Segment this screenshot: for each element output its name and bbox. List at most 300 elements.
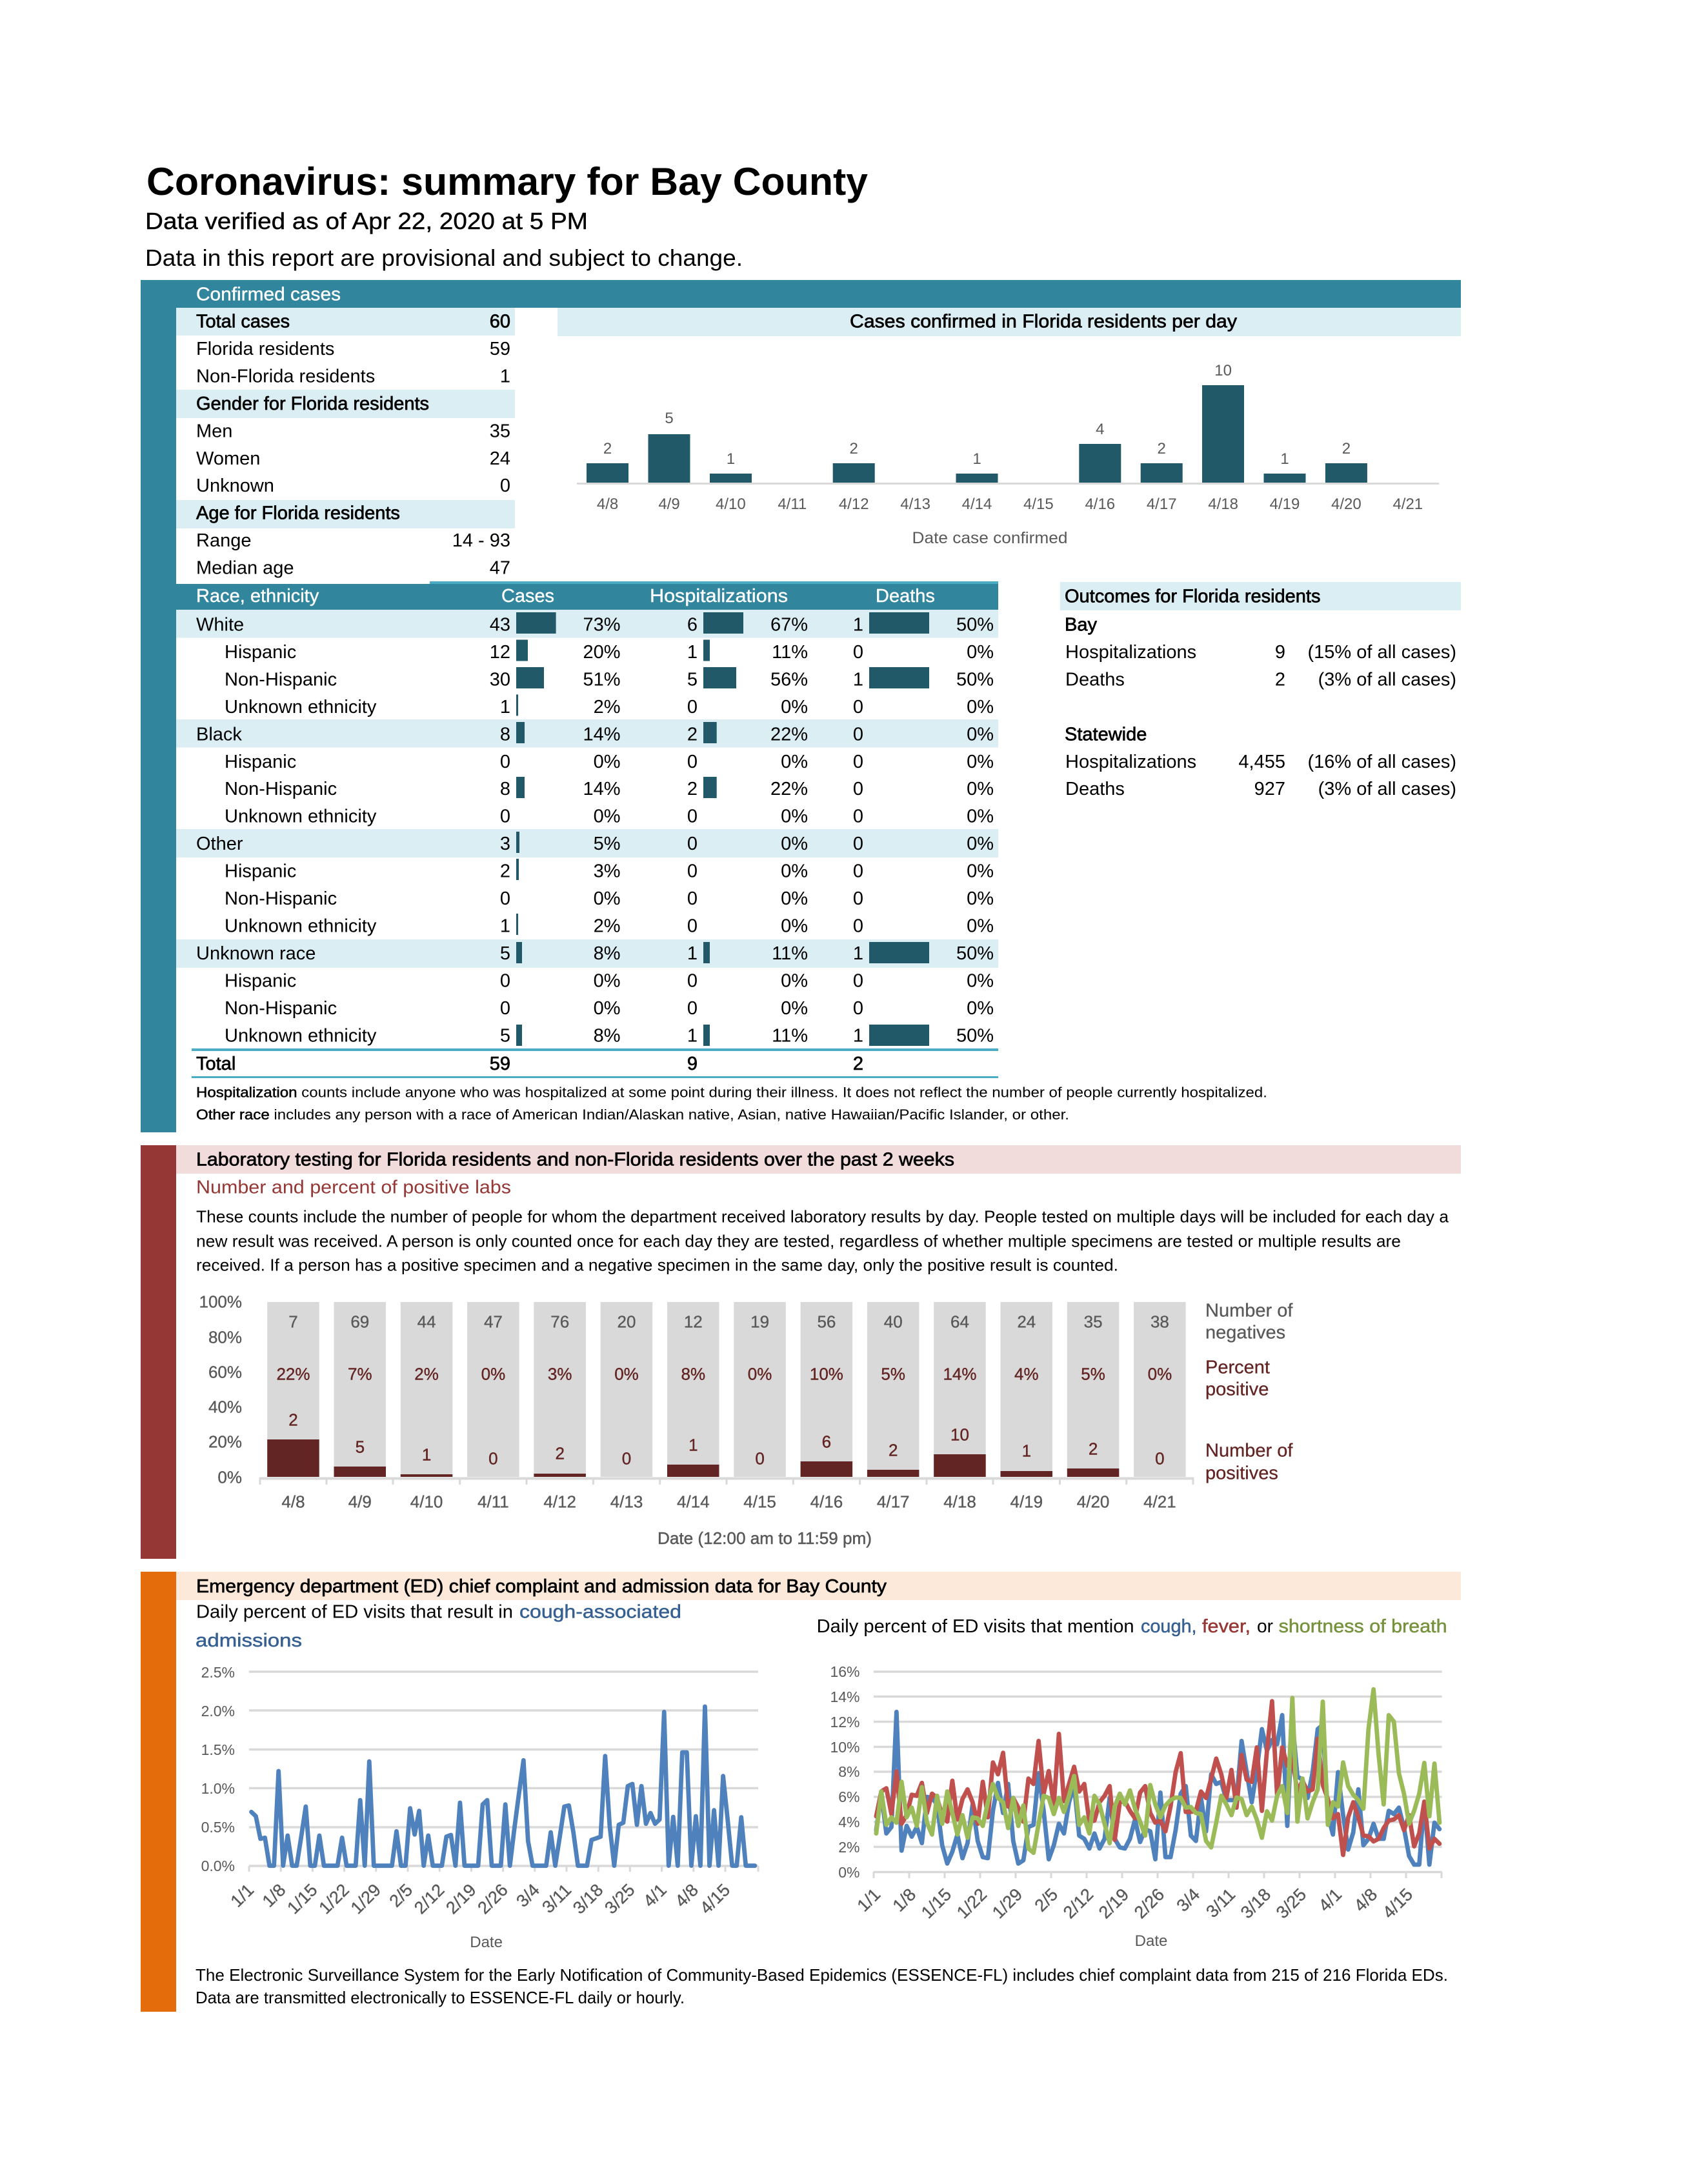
- race and ethnicity table: 5: [687, 669, 698, 690]
- bar chart: cases per day: 1: [727, 450, 735, 468]
- race and ethnicity table: Hospitalizations: [650, 586, 788, 606]
- line chart: cough-associated admissions: 2/19: [442, 1880, 480, 1918]
- line chart: cough, fever, shortness of breath: Date: [1135, 1932, 1167, 1950]
- stacked bar chart: positive labs: 80%: [208, 1328, 242, 1347]
- ESSENCE-FL note: Data are transmitted electronically to ESSENCE-FL daily or hourly.: [196, 1988, 685, 2007]
- case summary table: Non-Florida residents: [196, 366, 375, 387]
- stacked bar chart: positive labs: 0%: [748, 1364, 772, 1383]
- race and ethnicity table: 0: [853, 752, 863, 772]
- race and ethnicity table: 1: [853, 1025, 863, 1046]
- line chart: cough-associated admissions: 1.0%: [201, 1780, 235, 1797]
- race and ethnicity table: 0%: [967, 970, 994, 991]
- stacked bar chart: positive labs: 22%: [276, 1364, 310, 1383]
- race and ethnicity table: 2: [687, 779, 698, 799]
- stacked bar chart: positive labs: 2%: [414, 1364, 439, 1383]
- race and ethnicity table: 0%: [967, 916, 994, 937]
- line chart: cough-associated admissions: 1/15: [283, 1880, 321, 1918]
- stacked bar chart: positive labs: 44: [417, 1312, 436, 1332]
- stacked bar chart: positive labs: 4/12: [543, 1492, 576, 1511]
- race and ethnicity table: 0: [853, 998, 863, 1019]
- stacked bar chart: positive labs: 5%: [881, 1364, 905, 1383]
- race and ethnicity table: 1: [687, 1025, 698, 1046]
- line chart: cough-associated admissions: [201, 1664, 758, 1951]
- outcomes table: Bay: [1065, 614, 1097, 635]
- panel: emergency department data: [141, 1572, 1461, 2012]
- outcomes table: (15% of all cases): [1307, 642, 1456, 663]
- bar chart: cases per day: 5: [665, 410, 674, 427]
- footnote: hospitalization: Hospitalization counts include anyone who was hospitalized at some point during their illness. It does not reflect the number of people currently hospitalized.: [196, 1084, 1267, 1101]
- race and ethnicity table: 2: [687, 724, 698, 745]
- case summary table: Age for Florida residents: [196, 503, 400, 524]
- outcomes table: (3% of all cases): [1318, 779, 1456, 799]
- stacked bar chart: positive labs: 0: [622, 1449, 631, 1468]
- outcomes table: 4,455: [1238, 752, 1285, 772]
- footnote: other race: Other race includes any person with a race of American Indian/Alaskan native, Asian, native Hawaiian/Pacific Islander, or other.: [196, 1107, 1069, 1123]
- race and ethnicity table: 0%: [967, 724, 994, 745]
- case summary table: Total cases: [196, 311, 290, 332]
- legend: number of positives: positives: [1205, 1463, 1278, 1484]
- race and ethnicity table: 0%: [967, 752, 994, 772]
- case summary table: 60: [490, 311, 510, 332]
- race and ethnicity table: 0: [853, 970, 863, 991]
- stacked bar chart: positive labs: 60%: [208, 1363, 242, 1382]
- race and ethnicity table: 0: [853, 697, 863, 717]
- race and ethnicity table: 11%: [772, 1025, 808, 1046]
- legend: percent positive: [1205, 1357, 1270, 1400]
- bar chart: cases per day: 4/16: [1085, 496, 1115, 513]
- stacked bar chart: positive labs: 38: [1150, 1312, 1169, 1332]
- race and ethnicity table: 0: [853, 642, 863, 663]
- stacked bar chart: positive labs: 56: [817, 1312, 836, 1332]
- stacked bar chart: positive labs: 4/18: [943, 1492, 976, 1511]
- race and ethnicity table: Hispanic: [225, 970, 296, 991]
- line chart: cough-associated admissions: 3/4: [512, 1880, 543, 1911]
- race and ethnicity table: Unknown ethnicity: [225, 806, 377, 827]
- panel: confirmed cases: [141, 280, 1461, 1132]
- line chart: cough, fever, shortness of breath: 1/15: [918, 1885, 955, 1922]
- race and ethnicity table: Non-Hispanic: [225, 779, 337, 799]
- line chart: cough-associated admissions: 4/1: [639, 1880, 670, 1911]
- race and ethnicity table: 1: [853, 614, 863, 635]
- race and ethnicity table: 56%: [770, 669, 808, 690]
- line chart: cough-associated admissions: Date: [470, 1934, 503, 1951]
- race and ethnicity table: 11%: [772, 943, 808, 964]
- line chart: cough, fever, shortness of breath: 14%: [830, 1688, 859, 1705]
- stacked bar chart: positive labs: 8%: [681, 1364, 705, 1383]
- stacked bar chart: positive labs: 2: [555, 1444, 565, 1463]
- race and ethnicity table: 0%: [781, 998, 808, 1019]
- subheading: positive labs: Number and percent of positive labs: [196, 1177, 511, 1197]
- stacked bar chart: positive labs: 1: [1022, 1441, 1031, 1461]
- bar chart: cases per day: Date case confirmed: [912, 529, 1067, 547]
- race and ethnicity table: 1: [500, 916, 510, 937]
- line chart: cough, fever, shortness of breath: 6%: [838, 1788, 859, 1805]
- race and ethnicity table: 0: [853, 861, 863, 882]
- race and ethnicity table: 0%: [781, 752, 808, 772]
- subtitle: cough, fever, shortness of breath: or: [1257, 1616, 1273, 1637]
- stacked bar chart: positive labs: 2: [889, 1440, 898, 1459]
- race and ethnicity table: 43: [490, 614, 510, 635]
- stacked bar chart: positive labs: 35: [1084, 1312, 1103, 1332]
- case summary table: 35: [490, 421, 510, 441]
- heading: confirmed cases: Confirmed cases: [196, 284, 341, 305]
- race and ethnicity table: 0%: [781, 697, 808, 717]
- race and ethnicity table: 0: [687, 752, 698, 772]
- ESSENCE-FL note: The Electronic Surveillance System for the Early Notification of Community-Based Epidemics (ESSENCE-FL) includes chief complaint data from 215 of 216 Florida EDs.: [196, 1965, 1448, 1985]
- case summary table: 24: [490, 448, 510, 469]
- outcomes table: Deaths: [1065, 779, 1125, 799]
- stacked bar chart: positive labs: 4/17: [877, 1492, 910, 1511]
- stacked bar chart: positive labs: 0: [488, 1449, 498, 1468]
- bar chart: cases per day: 4/10: [716, 496, 746, 513]
- race and ethnicity table: Cases: [501, 586, 554, 606]
- stacked bar chart: positive labs: 6: [822, 1432, 831, 1452]
- race and ethnicity table: 0%: [967, 779, 994, 799]
- bar chart: cases per day: 4: [1096, 421, 1104, 438]
- outcomes table: Outcomes for Florida residents: [1065, 586, 1320, 606]
- stacked bar chart: positive labs: 0%: [1148, 1364, 1172, 1383]
- legend: number of negatives: [1205, 1301, 1293, 1343]
- stacked bar chart: positive labs: 1: [422, 1445, 431, 1465]
- line chart: cough, fever, shortness of breath: 4/1: [1314, 1885, 1345, 1916]
- line chart: cough, fever, shortness of breath: 10%: [830, 1739, 859, 1756]
- bar chart: cases per day: 4/21: [1392, 496, 1423, 513]
- outcomes table: Hospitalizations: [1065, 642, 1196, 663]
- explanatory paragraph: [196, 1207, 1449, 1275]
- race and ethnicity table: 12: [490, 642, 510, 663]
- subtitle: cough, fever, shortness of breath: Daily percent of ED visits that mention: [817, 1616, 1134, 1637]
- race and ethnicity table: Unknown race: [196, 943, 316, 964]
- race and ethnicity table: 2%: [594, 697, 621, 717]
- race and ethnicity table: 0: [500, 998, 510, 1019]
- race and ethnicity table: 3%: [594, 861, 621, 882]
- line chart: cough-associated admissions: 3/18: [569, 1880, 607, 1918]
- race and ethnicity table: 0: [853, 888, 863, 909]
- race and ethnicity table: 14%: [583, 779, 621, 799]
- race and ethnicity table: 0%: [594, 752, 621, 772]
- case summary table: Women: [196, 448, 260, 469]
- race and ethnicity table: 11%: [772, 642, 808, 663]
- outcomes table: Statewide: [1065, 724, 1147, 745]
- bar chart: cases per day: 4/17: [1147, 496, 1177, 513]
- bar chart: cases per day: 4/13: [900, 496, 930, 513]
- stacked bar chart: positive labs: 0%: [614, 1364, 639, 1383]
- race and ethnicity table: [176, 581, 998, 1078]
- outcomes table: [1060, 582, 1461, 799]
- stacked bar chart: positive labs: 14%: [943, 1364, 977, 1383]
- line chart: cough-associated admissions: 2.5%: [201, 1664, 235, 1681]
- race and ethnicity table: 0: [687, 970, 698, 991]
- stacked bar chart: positive labs: 4/16: [810, 1492, 843, 1511]
- line chart: cough, fever, shortness of breath: 3/18: [1237, 1885, 1274, 1922]
- bar chart: cases per day: 2: [603, 440, 612, 457]
- race and ethnicity table: 0: [687, 998, 698, 1019]
- race and ethnicity table: Hispanic: [225, 642, 296, 663]
- stacked bar chart: positive labs: [199, 1292, 1194, 1548]
- stacked bar chart: positive labs: 4/8: [281, 1492, 305, 1511]
- legend: number of positives: Number of: [1205, 1440, 1293, 1461]
- bar chart: cases per day: 4/8: [597, 496, 618, 513]
- stacked bar chart: positive labs: 76: [550, 1312, 569, 1332]
- race and ethnicity table: 1: [500, 697, 510, 717]
- line chart: cough, fever, shortness of breath: 16%: [830, 1663, 859, 1680]
- line chart: cough-associated admissions: 2/12: [410, 1880, 448, 1918]
- race and ethnicity table: 0%: [781, 861, 808, 882]
- race and ethnicity table: Unknown ethnicity: [225, 916, 377, 937]
- race and ethnicity table: 0: [687, 916, 698, 937]
- race and ethnicity table: 0%: [781, 888, 808, 909]
- line chart: cough, fever, shortness of breath: 8%: [838, 1763, 859, 1780]
- case summary table: Gender for Florida residents: [196, 394, 429, 414]
- stacked bar chart: positive labs: 4/13: [610, 1492, 643, 1511]
- race and ethnicity table: 0: [687, 806, 698, 827]
- race and ethnicity table: 59: [490, 1054, 510, 1074]
- ESSENCE-FL note: [196, 1965, 1448, 2007]
- bar chart: cases per day: 4/19: [1270, 496, 1300, 513]
- race and ethnicity table: 8: [500, 724, 510, 745]
- race and ethnicity table: Hispanic: [225, 752, 296, 772]
- stacked bar chart: positive labs: 4/20: [1077, 1492, 1109, 1511]
- line chart: cough, fever, shortness of breath: 1/22: [953, 1885, 990, 1922]
- line chart: cough-associated admissions: 1/22: [315, 1880, 353, 1918]
- outcomes table: 2: [1275, 669, 1285, 690]
- subtitle: cough-associated admissions: admissions: [196, 1630, 302, 1651]
- stacked bar chart: positive labs: 0: [1155, 1449, 1165, 1468]
- race and ethnicity table: 67%: [770, 614, 808, 635]
- bar chart: cases per day: 4/15: [1023, 496, 1054, 513]
- race and ethnicity table: 0%: [967, 834, 994, 854]
- outcomes table: (16% of all cases): [1307, 752, 1456, 772]
- race and ethnicity table: White: [196, 614, 244, 635]
- race and ethnicity table: 1: [687, 943, 698, 964]
- line chart: cough, fever, shortness of breath: 12%: [830, 1714, 859, 1730]
- race and ethnicity table: 0: [687, 888, 698, 909]
- bar chart: cases per day: 2: [1158, 440, 1166, 457]
- bar chart: cases per day: 1: [972, 450, 981, 468]
- heading: laboratory testing: Laboratory testing for Florida residents and non-Florida residents over the past 2 weeks: [196, 1150, 954, 1170]
- line chart: cough, fever, shortness of breath: 2/12: [1060, 1885, 1097, 1922]
- race and ethnicity table: 2: [853, 1054, 863, 1074]
- case summary table: 14 - 93: [452, 530, 510, 551]
- stacked bar chart: positive labs: 12: [684, 1312, 703, 1332]
- line chart: cough-associated admissions: 0.5%: [201, 1819, 235, 1836]
- race and ethnicity table: 0: [687, 861, 698, 882]
- case summary table: Median age: [196, 557, 294, 578]
- race and ethnicity table: Black: [196, 724, 242, 745]
- race and ethnicity table: 0%: [967, 861, 994, 882]
- line chart: cough-associated admissions: 2/26: [474, 1880, 512, 1918]
- line chart: cough, fever, shortness of breath: 2/26: [1130, 1885, 1168, 1922]
- subtitle: cough-associated admissions: cough-associated: [519, 1601, 681, 1622]
- race and ethnicity table: 0: [853, 834, 863, 854]
- race and ethnicity table: 51%: [583, 669, 621, 690]
- legend: percent positive: Percent: [1205, 1357, 1270, 1378]
- stacked bar chart: positive labs: 40: [884, 1312, 903, 1332]
- line chart: cough-associated admissions: 3/11: [538, 1880, 575, 1917]
- stacked bar chart: positive labs: 5%: [1081, 1364, 1105, 1383]
- stacked bar chart: positive labs: 19: [750, 1312, 769, 1332]
- race and ethnicity table: 14%: [583, 724, 621, 745]
- outcomes table: Deaths: [1065, 669, 1125, 690]
- outcomes table: 9: [1275, 642, 1285, 663]
- legend: number of positives: [1205, 1440, 1293, 1484]
- race and ethnicity table: 9: [687, 1054, 698, 1074]
- race and ethnicity table: 0: [500, 970, 510, 991]
- stacked bar chart: positive labs: 4/19: [1010, 1492, 1043, 1511]
- race and ethnicity table: 50%: [956, 1025, 994, 1046]
- stacked bar chart: positive labs: 64: [950, 1312, 969, 1332]
- line chart: cough, fever, shortness of breath: 4/15: [1379, 1885, 1416, 1922]
- case summary table: 0: [500, 476, 510, 496]
- title: Coronavirus: summary for Bay County: [146, 160, 869, 203]
- race and ethnicity table: 0: [500, 806, 510, 827]
- race and ethnicity table: 8: [500, 779, 510, 799]
- race and ethnicity table: 0%: [594, 970, 621, 991]
- case summary table: 1: [500, 366, 510, 387]
- race and ethnicity table: 0: [853, 916, 863, 937]
- line chart: cough, fever, shortness of breath: 1/1: [853, 1885, 884, 1916]
- explanatory paragraph: new result was received. A person is only counted once for each day they are tested, regardless of whether multiple specimens are tested or multiple results are: [196, 1231, 1401, 1250]
- race and ethnicity table: 0%: [967, 806, 994, 827]
- line chart: cough, fever, shortness of breath: 3/11: [1202, 1885, 1239, 1921]
- case summary table: Florida residents: [196, 339, 334, 359]
- line chart: cough-associated admissions: 4/8: [671, 1880, 702, 1911]
- race and ethnicity table: 50%: [956, 669, 994, 690]
- explanatory paragraph: These counts include the number of people for whom the department received laboratory results by day. People tested on multiple days will be included for each day a: [196, 1207, 1449, 1226]
- race and ethnicity table: 5: [500, 943, 510, 964]
- line chart: cough, fever, shortness of breath: 2%: [838, 1839, 859, 1856]
- race and ethnicity table: 22%: [770, 724, 808, 745]
- bar chart: cases per day: 10: [1214, 362, 1232, 379]
- stacked bar chart: positive labs: 4/21: [1143, 1492, 1176, 1511]
- race and ethnicity table: 0%: [781, 916, 808, 937]
- race and ethnicity table: 0%: [781, 834, 808, 854]
- bar chart: cases per day: 4/11: [778, 496, 807, 513]
- stacked bar chart: positive labs: 100%: [199, 1292, 242, 1311]
- race and ethnicity table: 50%: [956, 614, 994, 635]
- legend: percent positive: positive: [1205, 1379, 1269, 1400]
- race and ethnicity table: 73%: [583, 614, 621, 635]
- explanatory paragraph: received. If a person has a positive specimen and a negative specimen in the same day, only the positive result is counted.: [196, 1256, 1118, 1275]
- stacked bar chart: positive labs: 7: [288, 1312, 298, 1332]
- bar chart: cases per day: 2: [850, 440, 858, 457]
- race and ethnicity table: 0%: [967, 642, 994, 663]
- stacked bar chart: positive labs: 69: [350, 1312, 369, 1332]
- race and ethnicity table: Other: [196, 834, 243, 854]
- race and ethnicity table: 5%: [594, 834, 621, 854]
- race and ethnicity table: 5: [500, 1025, 510, 1046]
- race and ethnicity table: Hispanic: [225, 861, 296, 882]
- race and ethnicity table: Non-Hispanic: [225, 669, 337, 690]
- bar chart: cases per day: 4/20: [1331, 496, 1361, 513]
- stacked bar chart: positive labs: Date (12:00 am to 11:59 pm): [658, 1528, 872, 1548]
- subtitle: cough, fever, shortness of breath: [817, 1616, 1447, 1637]
- race and ethnicity table: Deaths: [876, 586, 935, 606]
- race and ethnicity table: 0%: [781, 970, 808, 991]
- bar chart: cases per day: Cases confirmed in Florida residents per day: [850, 311, 1238, 332]
- line chart: cough, fever, shortness of breath: 0%: [838, 1864, 859, 1881]
- race and ethnicity table: 0: [500, 888, 510, 909]
- heading: emergency department: Emergency department (ED) chief complaint and admission data for Bay County: [196, 1576, 887, 1597]
- line chart: cough, fever, shortness of breath: 1/8: [889, 1885, 919, 1916]
- line chart: cough-associated admissions: 2/5: [385, 1880, 416, 1911]
- race and ethnicity table: 1: [853, 943, 863, 964]
- bar chart: cases per day: 4/12: [839, 496, 869, 513]
- stacked bar chart: positive labs: 0: [755, 1449, 765, 1468]
- case summary table: Unknown: [196, 476, 274, 496]
- race and ethnicity table: 0: [500, 752, 510, 772]
- stacked bar chart: positive labs: 0%: [481, 1364, 505, 1383]
- bar chart: cases per day: 2: [1342, 440, 1351, 457]
- outcomes table: Hospitalizations: [1065, 752, 1196, 772]
- race and ethnicity table: 0: [853, 779, 863, 799]
- race and ethnicity table: 2%: [594, 916, 621, 937]
- line chart: cough-associated admissions: 1/1: [226, 1880, 257, 1911]
- race and ethnicity table: Total: [196, 1054, 236, 1074]
- panel: laboratory testing: [141, 1145, 1461, 1559]
- line chart: cough-associated admissions: 1.5%: [201, 1741, 235, 1758]
- stacked bar chart: positive labs: 4%: [1014, 1364, 1039, 1383]
- stacked bar chart: positive labs: 1: [688, 1435, 698, 1454]
- bar chart: cases per day: [558, 308, 1461, 547]
- stacked bar chart: positive labs: 10: [950, 1425, 969, 1444]
- stacked bar chart: positive labs: 40%: [208, 1398, 242, 1417]
- legend: number of negatives: negatives: [1205, 1323, 1285, 1343]
- line chart: cough, fever, shortness of breath: 4/8: [1350, 1885, 1381, 1916]
- stacked bar chart: positive labs: 20%: [208, 1432, 242, 1452]
- race and ethnicity table: 0: [687, 697, 698, 717]
- race and ethnicity table: 0: [687, 834, 698, 854]
- race and ethnicity table: 0%: [967, 888, 994, 909]
- stacked bar chart: positive labs: 4/11: [477, 1492, 509, 1511]
- line chart: cough-associated admissions: 1/29: [347, 1880, 385, 1918]
- outcomes table: (3% of all cases): [1318, 669, 1456, 690]
- race and ethnicity table: 3: [500, 834, 510, 854]
- line chart: cough, fever, shortness of breath: 2/19: [1095, 1885, 1132, 1922]
- case summary table: Range: [196, 530, 251, 551]
- case summary table: 59: [490, 339, 510, 359]
- race and ethnicity table: Unknown ethnicity: [225, 1025, 377, 1046]
- stacked bar chart: positive labs: 24: [1017, 1312, 1036, 1332]
- race and ethnicity table: 8%: [594, 1025, 621, 1046]
- race and ethnicity table: 50%: [956, 943, 994, 964]
- stacked bar chart: positive labs: 10%: [810, 1364, 843, 1383]
- bar chart: cases per day: 1: [1280, 450, 1289, 468]
- bar chart: cases per day: 4/18: [1208, 496, 1238, 513]
- case summary table: [176, 308, 515, 578]
- race and ethnicity table: 0%: [781, 806, 808, 827]
- line chart: cough-associated admissions: 4/15: [696, 1880, 734, 1918]
- race and ethnicity table: 0: [853, 724, 863, 745]
- race and ethnicity table: 20%: [583, 642, 621, 663]
- race and ethnicity table: Non-Hispanic: [225, 998, 337, 1019]
- stacked bar chart: positive labs: 5: [356, 1438, 365, 1457]
- race and ethnicity table: 22%: [770, 779, 808, 799]
- line chart: cough-associated admissions: 3/25: [601, 1880, 639, 1918]
- line chart: cough, fever, shortness of breath: 1/29: [989, 1885, 1026, 1922]
- stacked bar chart: positive labs: 4/9: [348, 1492, 372, 1511]
- subtitle: cough-associated admissions: [196, 1601, 681, 1651]
- line chart: cough, fever, shortness of breath: 3/4: [1172, 1885, 1203, 1916]
- subtitle: cough, fever, shortness of breath: shortness of breath: [1279, 1616, 1447, 1637]
- provisional note: Data in this report are provisional and subject to change.: [145, 245, 743, 271]
- bar chart: cases per day: 4/14: [962, 496, 992, 513]
- race and ethnicity table: Non-Hispanic: [225, 888, 337, 909]
- case summary table: 47: [490, 557, 510, 578]
- stacked bar chart: positive labs: 2: [288, 1410, 298, 1430]
- race and ethnicity table: 0%: [967, 998, 994, 1019]
- stacked bar chart: positive labs: 4/14: [677, 1492, 710, 1511]
